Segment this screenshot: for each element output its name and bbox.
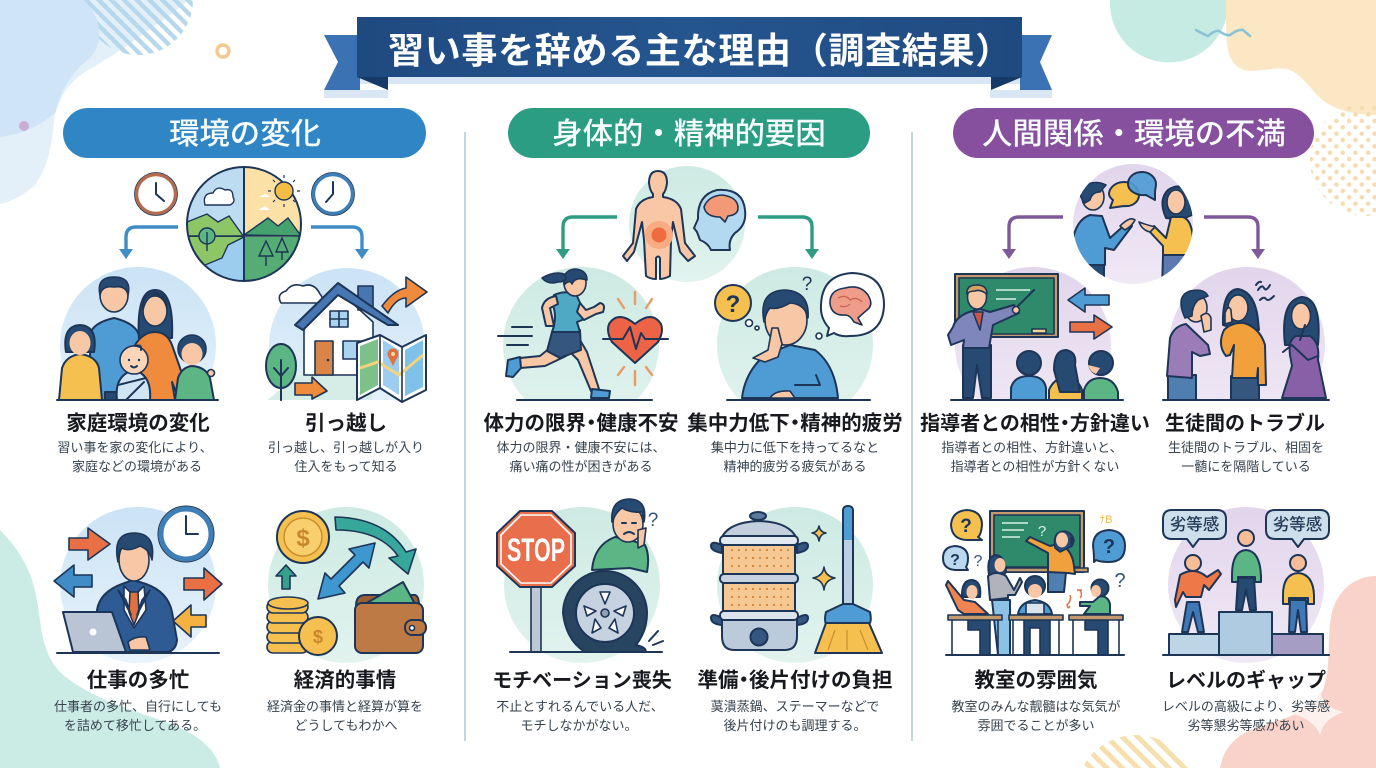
squiggle: annoyance — [1256, 282, 1274, 300]
illustration: money — [267, 507, 426, 663]
text: instructor: 指導者との相性、方針違いと、 — [941, 440, 1123, 455]
text: question mark: ? — [648, 510, 658, 531]
icons: question bubbles — [943, 510, 1126, 608]
text: stamina — [484, 412, 678, 474]
illustration: concentration — [714, 267, 885, 401]
speed lines — [498, 327, 532, 345]
figure: worker — [97, 533, 177, 652]
text: money — [267, 669, 423, 733]
figure: woman — [1139, 186, 1193, 290]
ribbon left tail — [324, 35, 360, 90]
text: money: 経済金の事情と経算が算を — [267, 699, 423, 714]
icon: chalkboard: ? — [1038, 523, 1046, 540]
text: work: 仕事者の多忙、自行にしても — [54, 699, 222, 714]
figure: man — [1074, 182, 1136, 277]
icon: clock — [158, 506, 214, 562]
heading pill — [63, 108, 426, 158]
text: money: 経済的事情 — [294, 669, 396, 692]
arrow: right — [1204, 217, 1265, 259]
text: student trouble: 生徒間のトラブル — [1165, 411, 1325, 435]
icon: house — [295, 283, 398, 375]
text: moving: 住入をもって知る — [294, 459, 398, 474]
icon: map — [357, 335, 426, 402]
icon: laptop — [63, 612, 126, 652]
text: chores: 茣潰蒸鍋、ステーマーなどで — [711, 699, 879, 714]
icon: stop sign: STOP — [507, 532, 565, 568]
column: relationships and environment — [920, 108, 1330, 733]
text: money: どうしてもわかへ — [295, 718, 397, 733]
text: stamina: 体力の限界・健康不安 — [484, 412, 678, 435]
illustration: body and brain — [623, 166, 745, 282]
illustration: classroom — [943, 510, 1126, 655]
text: moving — [268, 412, 424, 474]
icon: globe of seasons — [187, 167, 301, 282]
dot: purple — [19, 121, 29, 131]
text: motivation: モチベーション喪失 — [492, 669, 672, 692]
icon: yellow question bubble — [715, 285, 759, 330]
icons: question bubbles: ? — [960, 516, 972, 537]
figure: runner — [506, 269, 610, 398]
icon: clock right — [312, 172, 354, 216]
arrow: left — [119, 227, 178, 259]
icon: clock left — [134, 172, 178, 216]
figure: boy — [175, 335, 214, 400]
figure: father — [90, 277, 139, 400]
icon: orange arrow — [295, 377, 327, 399]
illustration: teacher and students — [947, 267, 1124, 401]
text: work — [54, 669, 222, 733]
icon: stop sign — [497, 511, 575, 587]
illustration: student trouble — [1162, 267, 1330, 401]
icon: coin front — [299, 617, 337, 655]
stripes: bottom yellow circle — [1082, 735, 1190, 768]
circle: top-right mint — [1110, 0, 1228, 62]
text: family: 家庭環境の変化 — [66, 412, 210, 435]
column: environment change — [54, 108, 427, 733]
text: classroom: 雰囲でることが多い — [977, 718, 1095, 733]
illustration: steamer and broom — [711, 506, 882, 663]
ribbon folds — [357, 77, 1022, 90]
illustration: busy at work — [54, 506, 222, 663]
speech bubble: right — [1266, 510, 1329, 547]
ribbon right tail — [1020, 35, 1052, 90]
text: family: 習い事を家の変化により、 — [57, 440, 213, 455]
text: motivation — [492, 669, 672, 733]
text: level gap — [1162, 669, 1330, 733]
figure: woman alone — [1282, 297, 1326, 398]
icons: desks — [948, 615, 1123, 655]
heading pill: 環境の変化 — [169, 117, 321, 151]
heading pill: 身体的・精神的要因 — [552, 117, 826, 151]
ribbon shadows — [324, 77, 1052, 98]
heading pill: 人間関係・環境の不満 — [982, 117, 1286, 151]
icon: coin front: $ — [313, 627, 323, 647]
icons: question bubbles: ? — [1114, 570, 1126, 592]
icons: question bubbles: ? — [950, 552, 960, 569]
text: concentration: 精神的疲労る疲気がある — [723, 459, 867, 474]
figures: seated students — [946, 576, 1110, 614]
title text: 習い事を辞める主な理由（調査結果） — [388, 30, 1012, 71]
ground line — [727, 399, 870, 401]
blob: top-left darker blue — [0, 0, 99, 137]
text: classroom: 教室の雰囲気 — [974, 669, 1098, 692]
figure: mother — [135, 290, 186, 400]
ground line — [517, 399, 652, 401]
sparkle: white star — [1286, 692, 1344, 735]
icon: coin top — [277, 511, 329, 563]
arrow: blue left — [1068, 288, 1109, 312]
podium — [1169, 612, 1323, 655]
text: instructor: 指導者との相性・方針違い — [920, 411, 1150, 435]
icon: coin top: $ — [296, 525, 310, 552]
stripes: top-left circle — [83, 0, 193, 55]
figure: right person — [1283, 555, 1314, 632]
ground line — [510, 651, 662, 653]
text: concentration — [687, 412, 903, 474]
arrow: orange right — [1070, 315, 1112, 339]
icon: orange arrow curved — [382, 277, 427, 313]
title ribbon — [324, 17, 1052, 98]
arrows around worker — [54, 528, 222, 637]
arrow: curved teal — [335, 517, 416, 574]
text: family — [57, 412, 213, 474]
text: student trouble: 生徒間のトラブル、相固を — [1168, 440, 1324, 455]
icon: tree — [266, 344, 296, 400]
text: question mark: ? — [802, 274, 812, 295]
text: chores: 後片付けのも調理する。 — [723, 718, 867, 733]
figure: worried person — [592, 499, 648, 572]
figure: girl — [59, 325, 102, 400]
text: concentration: 集中力低下・精神的疲労 — [687, 412, 903, 435]
figure: body — [623, 171, 695, 279]
divider left — [464, 132, 466, 741]
text: stamina: 痛い痛の性が困きがある — [509, 459, 653, 474]
text: work: を詰めて移忙してある。 — [64, 718, 206, 733]
text: moving: 引っ越し — [305, 412, 387, 435]
ground line — [1163, 654, 1329, 656]
column: physical and mental factors — [484, 108, 903, 733]
text: student trouble: 一髄にを隔階している — [1181, 459, 1311, 474]
arrow: right — [758, 217, 819, 259]
icon: coin stack — [267, 597, 308, 653]
blob: top-left blue — [0, 0, 190, 204]
ribbon band — [357, 17, 1022, 77]
arrow: small green up — [276, 565, 296, 589]
ground line — [951, 399, 1123, 401]
illustration: conversation — [1072, 164, 1193, 290]
text: instructor: 指導者との相性が方針くない — [951, 459, 1119, 474]
ground line — [946, 654, 1124, 656]
text: level gap: 劣等懇劣等感があい — [1187, 718, 1305, 733]
text: concentration: 集中力に低下を持ってるなと — [711, 440, 879, 455]
arrow: left — [1002, 217, 1063, 259]
blob: bottom-right pink — [1220, 576, 1376, 768]
icon: cloud — [279, 285, 322, 303]
road — [268, 375, 372, 400]
heading pill — [953, 108, 1314, 158]
ground line — [1163, 399, 1329, 401]
icons: question bubbles: ? — [1103, 536, 1115, 558]
icon: head with brain — [694, 190, 745, 250]
illustration: stop sign and tire — [497, 499, 663, 663]
text: stamina: 体力の限界・健康不安には、 — [496, 440, 666, 455]
ground line — [57, 399, 218, 401]
icon: wallet — [355, 582, 426, 653]
text: level gap: レベルの高級により、劣等感 — [1162, 699, 1330, 714]
illustration: level gap — [1163, 507, 1329, 663]
figure: baby — [117, 346, 150, 400]
icon: chalkboard — [955, 274, 1058, 337]
figure: teacher — [1026, 531, 1075, 592]
figure: middle person — [1232, 530, 1261, 610]
illustration: runner and heart — [497, 267, 669, 401]
text: chores: 準備・後片付けの負担 — [698, 669, 892, 692]
ground line — [57, 652, 219, 654]
text: motivation: モチしなかがない。 — [520, 718, 638, 733]
text: instructor — [920, 411, 1150, 474]
speech bubble: right: 劣等感 — [1273, 515, 1322, 534]
icon: stop sign post — [531, 587, 541, 652]
icon: speech bubbles — [1109, 172, 1156, 208]
icon: heart with pulse — [603, 292, 668, 385]
dots: right halftone — [1310, 104, 1376, 216]
text: student trouble — [1165, 411, 1325, 474]
text: family: 家庭などの環境がある — [72, 459, 202, 474]
speech bubble: left — [1163, 510, 1226, 547]
blob: bottom-left mint — [0, 530, 220, 768]
wave: blue zigzag — [1196, 30, 1250, 36]
text: moving: 引っ越し、引っ越しが入り — [268, 440, 424, 455]
icons: question bubbles: ﾅB — [1100, 514, 1112, 526]
illustration: moving house — [265, 268, 428, 403]
figure: woman listening — [1221, 289, 1266, 400]
text: classroom — [951, 669, 1121, 733]
icons: question bubbles: ? — [974, 553, 983, 570]
figure: teacher — [948, 285, 1034, 398]
text: motivation: 不止とすれるんでいる人だ、 — [496, 699, 664, 714]
arrow: right — [311, 227, 369, 259]
arrow: left — [556, 217, 617, 259]
figure: thinking person — [742, 290, 838, 398]
icon: chalkboard — [990, 511, 1088, 572]
icon: sparkles — [812, 526, 835, 590]
icon: broom — [815, 506, 882, 653]
figure: standing girl — [988, 555, 1022, 655]
text: chores — [698, 669, 892, 733]
blob: top-right peach — [1226, 0, 1376, 115]
arrow: double blue — [318, 543, 375, 599]
pain spot — [645, 221, 673, 249]
icon: flat tire — [563, 571, 663, 652]
icon: steamer — [711, 512, 808, 650]
icon: brain bubble — [816, 273, 884, 339]
figure: man whispering — [1167, 290, 1211, 400]
divider right — [911, 132, 913, 741]
speech bubble: left: 劣等感 — [1170, 515, 1219, 534]
heading pill — [508, 108, 870, 158]
figures: students — [1011, 350, 1118, 400]
figure: left person — [1175, 555, 1221, 632]
illustration: family — [56, 267, 219, 401]
ring: orange — [217, 45, 229, 57]
text: work: 仕事の多忙 — [87, 669, 189, 692]
text: level gap: レベルのギャップ — [1166, 669, 1326, 692]
text: classroom: 教室のみんな靓髓はな気気が — [951, 699, 1121, 714]
icon: yellow question bubble: ? — [726, 291, 740, 318]
